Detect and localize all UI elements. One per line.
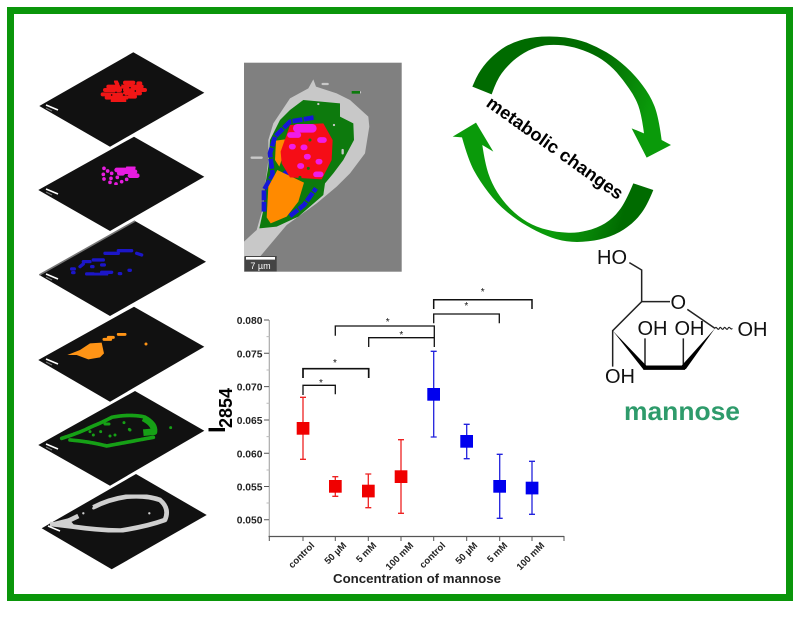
axes and ticks xyxy=(264,320,564,541)
layer map: gray outline xyxy=(42,474,207,569)
structure: mannose molecule: HO xyxy=(597,247,627,269)
lower arrow xyxy=(453,123,653,242)
structure: mannose molecule: OH xyxy=(674,318,704,340)
structure: mannose molecule: OH xyxy=(605,366,635,388)
y tick labels: 0.050 xyxy=(237,516,263,527)
magenta patches xyxy=(297,115,312,141)
layer map: orange cluster xyxy=(38,307,204,402)
structure: mannose molecule xyxy=(597,247,768,426)
y tick labels: 0.070 xyxy=(237,383,263,394)
layer map: magenta cluster xyxy=(38,137,204,231)
panel: stacked spectral layer maps xyxy=(38,52,207,569)
blue region xyxy=(264,117,316,216)
chart: I2854 versus mannose concentration xyxy=(204,287,564,586)
x tick labels: 5 mM xyxy=(485,540,510,565)
x tick labels: control xyxy=(287,540,317,571)
upper arrow xyxy=(472,36,671,158)
x axis title: Concentration of mannose xyxy=(333,572,501,586)
green region xyxy=(259,100,354,228)
y tick labels: 0.075 xyxy=(237,349,263,360)
x tick labels: 100 mM xyxy=(515,540,547,573)
panel: composite cell map with scale bar xyxy=(244,63,402,272)
layer map: red cluster xyxy=(39,52,204,147)
significance stars xyxy=(319,287,485,389)
structure: mannose molecule: OH xyxy=(638,318,668,340)
significance stars: * xyxy=(481,287,485,298)
blue series xyxy=(427,351,538,518)
y tick labels: 0.065 xyxy=(237,416,263,427)
x tick labels xyxy=(287,540,547,573)
y axis title: 2854 xyxy=(216,388,236,428)
layer map: green ring xyxy=(38,391,204,486)
x tick labels: 50 µM xyxy=(323,540,349,567)
significance stars: * xyxy=(386,317,390,328)
significance stars: * xyxy=(319,378,323,389)
x tick labels: 100 mM xyxy=(384,540,416,573)
y axis title xyxy=(204,388,236,433)
y axis title: I xyxy=(204,426,231,433)
x tick labels: 50 µM xyxy=(454,540,480,567)
red series xyxy=(297,397,407,513)
y tick labels: 0.080 xyxy=(237,316,263,327)
x tick labels: 5 mM xyxy=(354,540,379,565)
layer map: blue cluster xyxy=(39,221,206,316)
scale bar xyxy=(245,256,277,272)
y tick labels xyxy=(237,316,263,527)
red nucleus xyxy=(281,123,333,179)
scale label: 7 µm xyxy=(250,261,271,271)
y tick labels: 0.055 xyxy=(237,482,263,494)
y tick labels: 0.060 xyxy=(237,449,263,460)
structure: mannose molecule: O xyxy=(670,292,686,314)
orange region xyxy=(267,170,304,223)
significance stars: * xyxy=(464,301,468,312)
structure: mannose molecule: OH xyxy=(738,319,768,341)
cell outline: gray xyxy=(244,79,369,257)
cycle arrows: metabolic changes xyxy=(453,36,671,242)
x tick labels: control xyxy=(418,540,448,571)
molecule name: mannose xyxy=(624,396,740,426)
significance stars: * xyxy=(333,358,337,369)
significance brackets xyxy=(303,300,532,395)
significance stars: * xyxy=(399,330,403,341)
cycle label: metabolic changes xyxy=(483,93,627,203)
